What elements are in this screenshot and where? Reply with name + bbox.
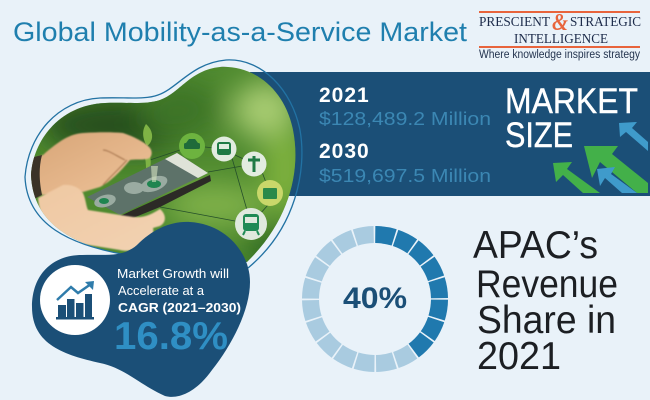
lower hand <box>38 185 165 251</box>
year 2030 value: 2030 <box>319 140 370 163</box>
donut label: 40% <box>343 282 407 315</box>
APAC revenue share text: 2021 <box>477 335 561 378</box>
APAC revenue share text: Revenue <box>476 263 618 306</box>
market size heading: SIZE <box>505 116 573 155</box>
donut chart 40% <box>310 234 440 364</box>
logo: STRATEGIC <box>570 15 641 30</box>
icon: growth chart <box>40 265 110 335</box>
logo: PRESCIENT <box>479 15 550 30</box>
market size heading: MARKET <box>505 82 638 121</box>
APAC revenue share text <box>473 224 618 378</box>
year 2021 value <box>319 84 491 129</box>
growth arrows <box>553 122 648 193</box>
market size heading <box>505 82 638 155</box>
CAGR blob <box>32 222 250 397</box>
icon: taxi <box>179 133 205 159</box>
CAGR text: Market Growth will <box>117 267 229 281</box>
APAC revenue share text: Share in <box>477 299 616 342</box>
logo: INTELLIGENCE <box>514 32 608 47</box>
title: Global Mobility-as-a-Service Market <box>13 17 468 47</box>
year 2021 value: 2021 <box>319 84 370 107</box>
CAGR blob: CAGR (2021–2030) <box>118 300 241 315</box>
upper hand <box>30 132 152 195</box>
logo: & <box>552 10 568 36</box>
wrist strap <box>30 155 42 199</box>
icon: bus <box>212 136 236 162</box>
logo <box>479 10 641 61</box>
CAGR blob: Accelerate at a <box>118 284 204 298</box>
icon: leaf <box>143 124 152 168</box>
connector lines <box>150 146 270 224</box>
icon: luggage <box>257 180 283 206</box>
icon: train <box>235 208 267 240</box>
year 2030 value <box>319 140 491 186</box>
year 2021 value: $128,489.2 Million <box>319 108 491 129</box>
APAC revenue share text: APAC’s <box>473 224 598 267</box>
year 2030 value: $519,697.5 Million <box>319 165 491 186</box>
phone <box>87 153 211 218</box>
photo blob: phone with mobility icons <box>31 66 296 262</box>
market size band <box>250 72 650 196</box>
icon: cyclist <box>242 152 266 176</box>
CAGR value: 16.8% <box>114 315 228 358</box>
photo blob outline <box>25 60 302 268</box>
